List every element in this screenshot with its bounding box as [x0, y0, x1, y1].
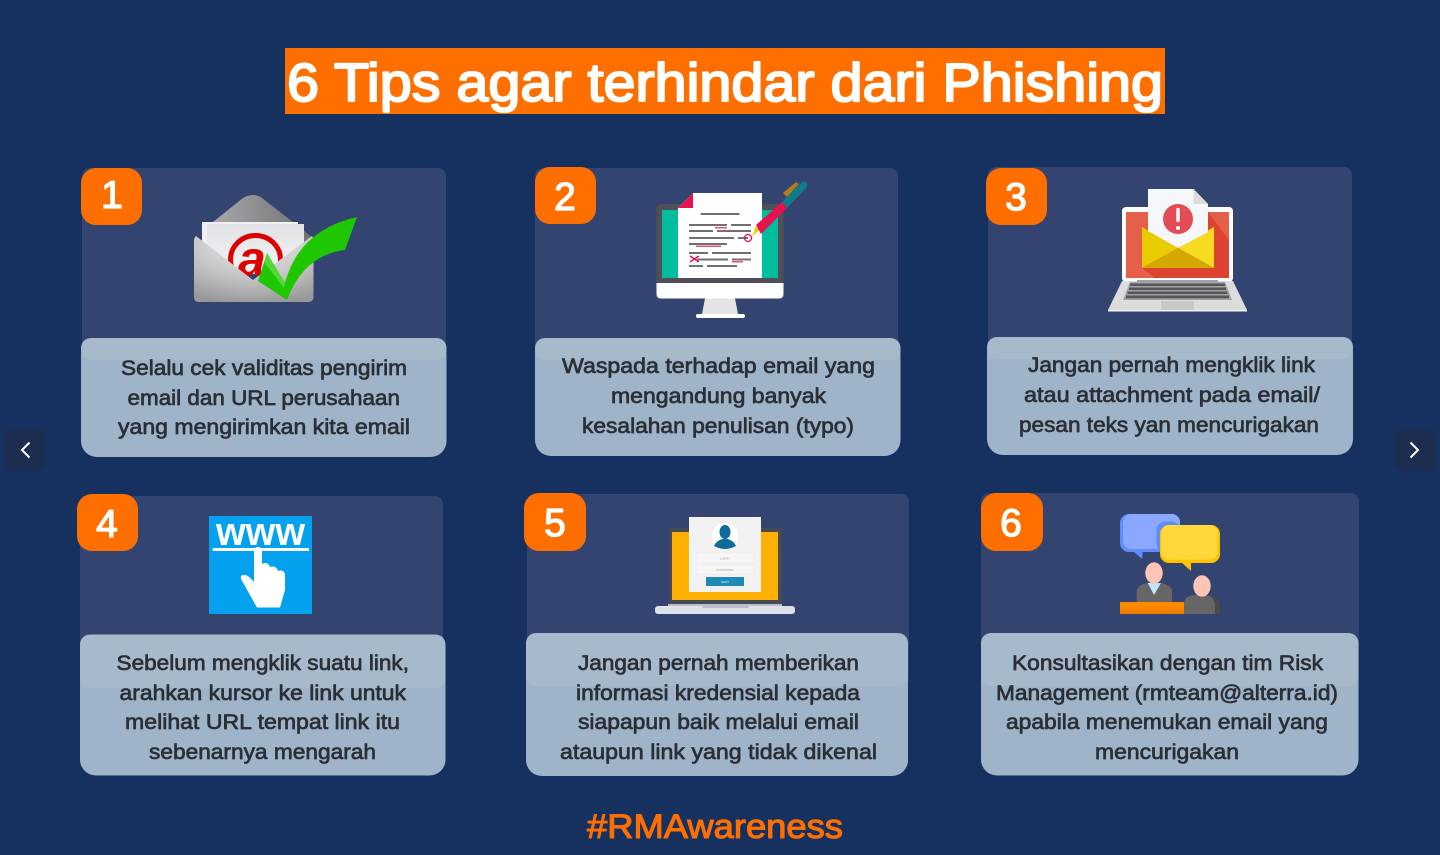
icon: monitor with document and pen [656, 181, 807, 318]
icon: email with check mark: a [238, 231, 266, 287]
text: tip 2: Waspada terhadap email yang [562, 354, 875, 378]
icon: laptop with login form [655, 517, 795, 614]
text: tip 5: ataupun link yang tidak dikenal [560, 740, 877, 764]
text: tip 4: melihat URL tempat link itu [125, 710, 400, 734]
icon: www click [209, 510, 312, 614]
panel: tip 3 [986, 167, 1353, 455]
badge: 2: 2 [554, 176, 576, 219]
arrow: next [1395, 430, 1435, 470]
text: tip 1: Selalu cek validitas pengirim [121, 356, 407, 380]
panel: tip 2 [535, 167, 900, 456]
text: tip 1: yang mengirimkan kita email [118, 415, 410, 439]
icon: laptop with login form: PASSWORD [716, 568, 734, 572]
icon: www click: www [215, 510, 306, 554]
title: 6 Tips agar terhindar dari Phishing [287, 53, 1163, 113]
icon: laptop with login form: LOGIN [720, 556, 730, 560]
badge: 5: 5 [544, 502, 566, 545]
hashtag: #RMAwareness [587, 808, 843, 846]
text: tip 1: email dan URL perusahaan [128, 386, 400, 410]
badge: 5 [524, 493, 586, 551]
panel: tip 5 [524, 493, 909, 776]
badge: 4 [77, 494, 138, 551]
arrow: previous [5, 430, 45, 470]
badge: 2 [535, 167, 596, 224]
text: tip 4: sebenarnya mengarah [149, 740, 376, 764]
text: tip 4: Sebelum mengklik suatu link, [116, 651, 409, 675]
text: tip 6 [996, 651, 1338, 764]
panel: tip 4 [77, 494, 446, 776]
text: tip 2: kesalahan penulisan (typo) [582, 414, 854, 438]
text: tip 5: Jangan pernah memberikan [578, 651, 859, 675]
text: tip 3: pesan teks yan mencurigakan [1019, 413, 1319, 437]
icon: email with check mark [194, 195, 357, 302]
text: tip 6: Management (rmteam@alterra.id) [996, 681, 1338, 705]
text: tip 6: mencurigakan [1095, 740, 1239, 764]
text: tip 5 [560, 651, 877, 764]
badge: 6: 6 [1000, 502, 1022, 545]
text: tip 4 [116, 651, 409, 764]
badge: 3 [986, 168, 1047, 225]
text: tip 3 [1019, 353, 1320, 437]
badge: 6 [981, 493, 1043, 551]
panel: tip 6 [981, 493, 1359, 776]
icon: laptop with login form: NEXT [721, 580, 729, 584]
badge: 1 [81, 168, 142, 225]
icon: consultation with speech bubbles [1120, 514, 1220, 614]
text: tip 5: informasi kredensial kepada [576, 681, 860, 705]
text: tip 2: mengandung banyak [611, 384, 826, 408]
text: tip 3: atau attachment pada email/ [1024, 383, 1320, 407]
text: tip 6: apabila menemukan email yang [1006, 710, 1328, 734]
icon: laptop with warning email [1108, 189, 1247, 312]
badge: 1: 1 [101, 174, 123, 217]
badge: 3: 3 [1005, 176, 1027, 219]
text: tip 1 [118, 356, 410, 439]
text: tip 6: Konsultasikan dengan tim Risk [1012, 651, 1323, 675]
text: tip 3: Jangan pernah mengklik link [1028, 353, 1315, 377]
badge: 4: 4 [96, 503, 118, 546]
text: tip 2 [562, 354, 875, 438]
text: tip 5: siapapun baik melalui email [578, 710, 859, 734]
text: tip 4: arahkan kursor ke link untuk [120, 681, 406, 705]
panel: tip 1 [81, 168, 446, 457]
